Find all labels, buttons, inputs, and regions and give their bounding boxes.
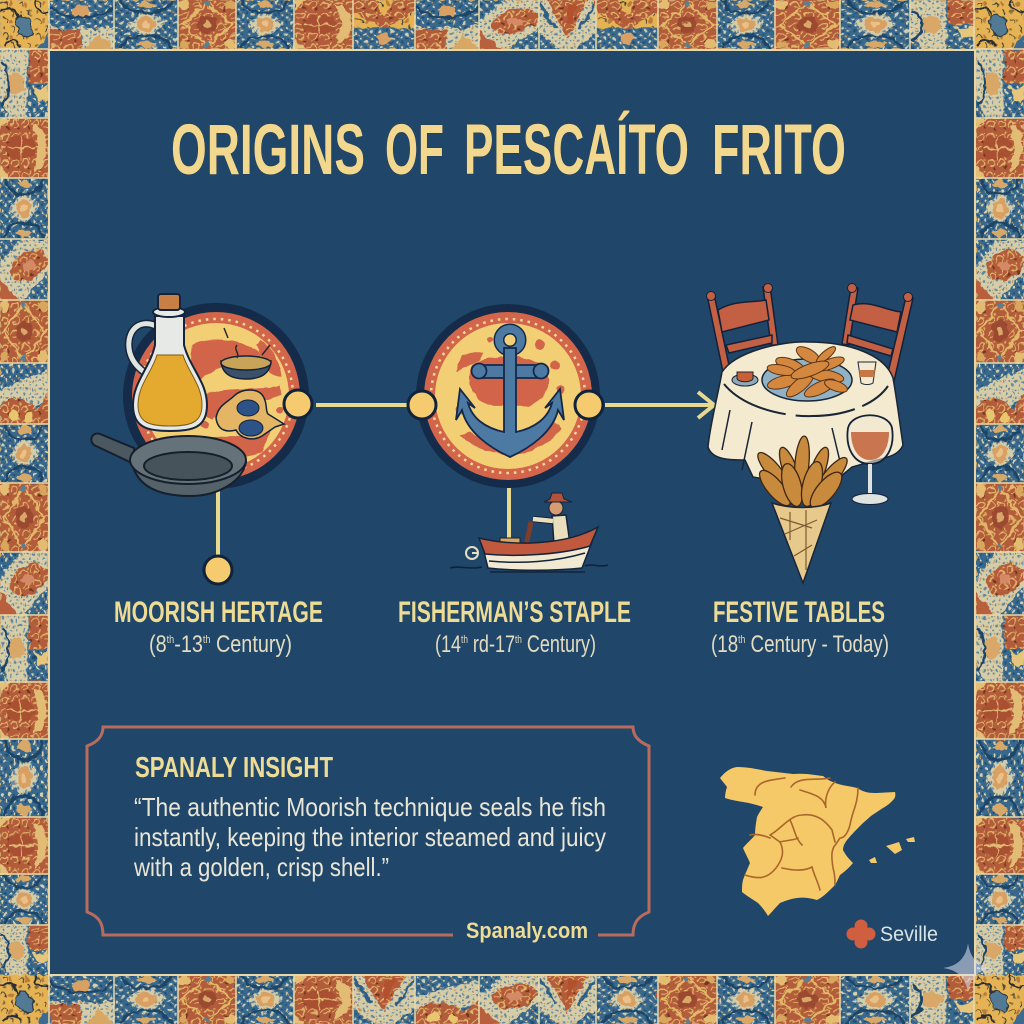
tablecloth bbox=[708, 342, 903, 481]
timeline nodes bbox=[204, 390, 603, 584]
plate of fried fish bbox=[762, 343, 852, 401]
label: Moorish heritage: th bbox=[203, 634, 210, 646]
callout quote bbox=[133, 792, 606, 882]
callout heading: SPANALY INSIGHT bbox=[135, 752, 333, 784]
title bbox=[171, 111, 846, 190]
icon: bowl of stew bbox=[221, 328, 271, 379]
icon: festive table with chairs bbox=[706, 284, 913, 583]
title: OF bbox=[385, 111, 444, 190]
label: Moorish heritage: th bbox=[167, 634, 174, 646]
icon: fisherman in boat bbox=[450, 493, 608, 572]
label: Fisherman's staple: rd-17 bbox=[468, 631, 515, 658]
label: Moorish heritage: -13 bbox=[174, 631, 203, 658]
icon: fried fish with olives bbox=[216, 390, 284, 439]
map marker: Seville bbox=[846, 920, 938, 948]
label: Festive tables: FESTIVE TABLES bbox=[713, 596, 885, 629]
label: Fisherman's staple: th bbox=[515, 634, 522, 646]
label: Fisherman's staple bbox=[398, 596, 631, 658]
icon: olive oil bottle bbox=[129, 294, 207, 431]
label: Moorish heritage bbox=[114, 596, 323, 658]
icon: frying pan bbox=[91, 434, 246, 496]
title: FRITO bbox=[712, 111, 846, 190]
small glass bbox=[858, 362, 876, 384]
title: ORIGINS bbox=[171, 111, 365, 190]
label: Fisherman's staple: Century) bbox=[522, 631, 596, 658]
Balearic islands bbox=[869, 837, 915, 863]
medallion: Moorish heritage bbox=[123, 303, 309, 489]
label: Fisherman's staple: FISHERMAN’S STAPLE bbox=[398, 596, 631, 629]
label: Festive tables bbox=[711, 596, 889, 658]
label: Festive tables: th bbox=[738, 634, 745, 646]
chairs bbox=[706, 284, 913, 390]
callout quote: instantly, keeping the interior steamed and juicy bbox=[134, 822, 606, 852]
map of Spain bbox=[720, 767, 915, 916]
paper cone of fried fish bbox=[753, 435, 852, 583]
callout quote: “The authentic Moorish technique seals he fish bbox=[134, 792, 606, 822]
fisherman bbox=[526, 493, 572, 546]
label: Moorish heritage: (8 bbox=[149, 631, 170, 658]
callout: Spanaly insight bbox=[87, 727, 649, 943]
title: PESCAÍTO bbox=[464, 111, 689, 190]
brand link text: Spanaly.com bbox=[466, 918, 588, 943]
label: Festive tables: (18 bbox=[711, 631, 746, 658]
stage labels bbox=[114, 596, 889, 658]
icon: anchor bbox=[456, 329, 564, 457]
small sauce dish bbox=[732, 372, 758, 386]
medallion: fisherman's staple bbox=[416, 304, 600, 488]
label: Festive tables: Century - Today) bbox=[745, 631, 889, 658]
watermark sparkle bbox=[943, 943, 993, 993]
wine glass bbox=[847, 415, 893, 504]
label: Fisherman's staple: (14 bbox=[435, 631, 470, 658]
label: Fisherman's staple: th bbox=[461, 634, 468, 646]
map marker: Seville: Seville bbox=[880, 923, 938, 946]
label: Moorish heritage: Century) bbox=[210, 631, 292, 658]
callout quote: with a golden, crisp shell.” bbox=[133, 852, 389, 882]
timeline connector lines bbox=[218, 392, 714, 556]
label: Moorish heritage: MOORISH HERTAGE bbox=[114, 596, 323, 629]
callout frame bbox=[87, 727, 649, 935]
